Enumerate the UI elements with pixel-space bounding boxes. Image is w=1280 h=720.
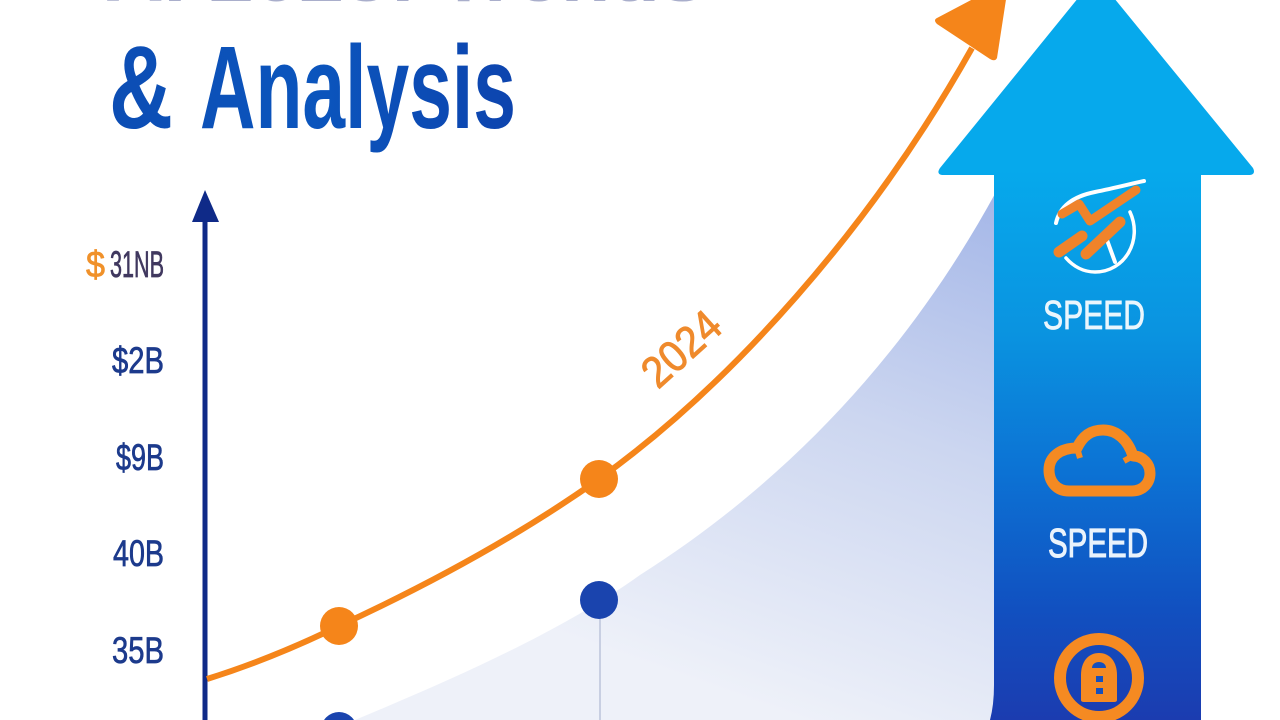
orange growth line with arrowhead	[207, 0, 1009, 679]
shaded growth area	[355, 192, 996, 720]
y axis arrow	[192, 190, 219, 720]
label: 40B: 40B	[113, 533, 164, 574]
label: $31NB	[86, 244, 164, 285]
title: & Analysis: &	[109, 22, 173, 154]
title: & Analysis: Analysis	[200, 22, 516, 154]
icon: padlock	[1060, 639, 1138, 717]
blue data point with stem	[580, 581, 618, 720]
year label 2024: 2024	[632, 301, 732, 397]
title: & Analysis	[109, 22, 516, 154]
orange data point	[320, 607, 358, 645]
big upward arrow	[938, 0, 1254, 720]
icon: speed chart	[1056, 181, 1144, 272]
label: $31NB: $	[86, 244, 105, 285]
label: 35B: 35B	[112, 630, 164, 671]
y axis labels	[86, 244, 164, 671]
label: $31NB: 31NB	[110, 244, 164, 285]
orange data point	[580, 460, 618, 498]
blue data point	[321, 712, 357, 720]
label: SPEED: SPEED	[1043, 292, 1145, 338]
label: $2B: $2B	[112, 340, 164, 381]
icon: cloud	[1049, 430, 1150, 491]
label: SPEED: SPEED	[1048, 520, 1148, 566]
label: $9B: $9B	[116, 437, 164, 478]
